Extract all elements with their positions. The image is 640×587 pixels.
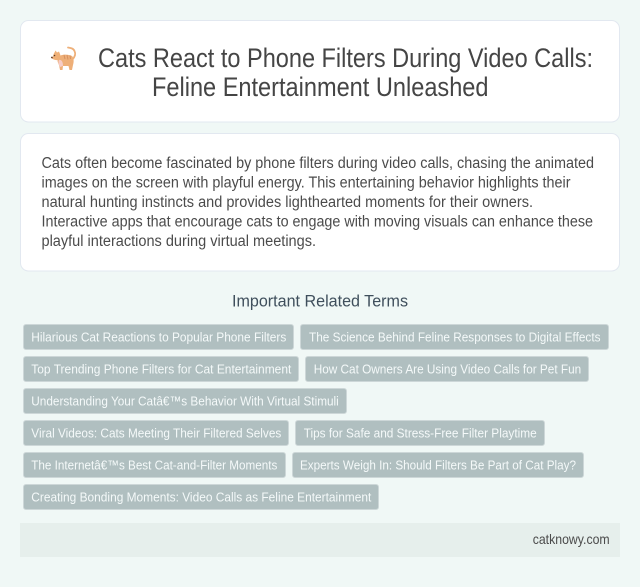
title: Feline Entertainment Unleashed bbox=[152, 72, 488, 102]
text block: description: Cats often become fascinated by phone filters during video calls, chasing the animated bbox=[42, 155, 594, 172]
tag: internet's best moments bbox=[24, 452, 286, 478]
panel: related term tags bbox=[24, 324, 608, 510]
text block: description bbox=[42, 155, 594, 250]
tag: experts weigh in: Experts Weigh In: Should Filters Be Part of Cat Play? bbox=[300, 458, 576, 472]
icon: orange cat bbox=[51, 48, 75, 70]
tag: creating bonding moments bbox=[24, 484, 378, 510]
tag: creating bonding moments: Creating Bonding Moments: Video Calls as Feline Entertainment bbox=[31, 490, 372, 504]
tag: understanding your cat's behavior bbox=[24, 388, 346, 414]
tag: science behind feline responses bbox=[300, 324, 608, 350]
tag: cat owners using video calls bbox=[306, 356, 588, 382]
tag: viral videos: Viral Videos: Cats Meeting Their Filtered Selves bbox=[31, 426, 282, 440]
tag: understanding your cat's behavior: Understanding Your Catâ€™s Behavior With Virtual Stimuli bbox=[31, 394, 339, 408]
tag: experts weigh in bbox=[292, 452, 584, 478]
tag: cat owners using video calls: How Cat Owners Are Using Video Calls for Pet Fun bbox=[314, 362, 581, 376]
text block: description: Interactive apps that encourage cats to engage with moving visuals can enhance these bbox=[42, 214, 593, 230]
tag: safe filter playtime tips bbox=[296, 420, 544, 446]
tag: science behind feline responses: The Science Behind Feline Responses to Digital Effects bbox=[309, 330, 601, 344]
panel: description card bbox=[20, 134, 620, 271]
tag: safe filter playtime tips: Tips for Safe and Stress-Free Filter Playtime bbox=[304, 426, 537, 440]
panel: title card bbox=[20, 20, 620, 122]
tag: top trending phone filters bbox=[24, 356, 298, 382]
footer site name: catknowy.com bbox=[533, 532, 610, 547]
text block: description: playful interactions during virtual meetings. bbox=[42, 233, 316, 250]
text block: description: images on the screen with playful energy. This entertaining behavior highlights their bbox=[42, 174, 570, 192]
tag: hilarious cat reactions: Hilarious Cat Reactions to Popular Phone Filters bbox=[31, 330, 287, 344]
tag: top trending phone filters: Top Trending Phone Filters for Cat Entertainment bbox=[31, 362, 292, 376]
tag: internet's best moments: The Internetâ€™s Best Cat-and-Filter Moments bbox=[31, 458, 278, 472]
tag: hilarious cat reactions bbox=[24, 324, 294, 350]
footer bar bbox=[20, 523, 620, 557]
title bbox=[98, 43, 593, 102]
title: Cats React to Phone Filters During Video Calls: bbox=[98, 43, 593, 73]
text block: description: natural hunting instincts and provides lighthearted moments for their owners. bbox=[42, 194, 533, 211]
heading: important related terms: Important Related Terms bbox=[232, 292, 408, 310]
tag: viral videos bbox=[24, 420, 288, 446]
